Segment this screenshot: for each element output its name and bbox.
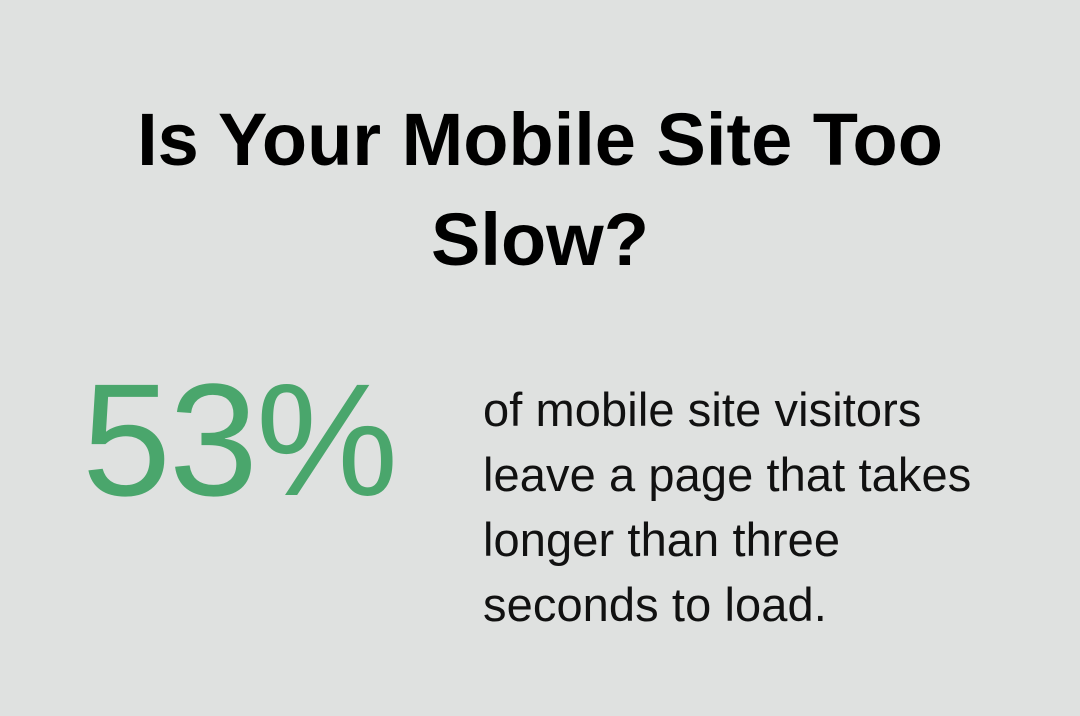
description text <box>483 383 971 631</box>
big statistic: 53%: 53% <box>82 350 396 529</box>
description text: longer than three <box>483 513 840 566</box>
description text: seconds to load. <box>483 578 827 631</box>
title: Is Your Mobile Site Too <box>137 98 943 181</box>
description text: leave a page that takes <box>483 448 971 501</box>
title: Slow? <box>431 198 649 281</box>
description text: of mobile site visitors <box>483 383 922 436</box>
title <box>137 98 943 281</box>
